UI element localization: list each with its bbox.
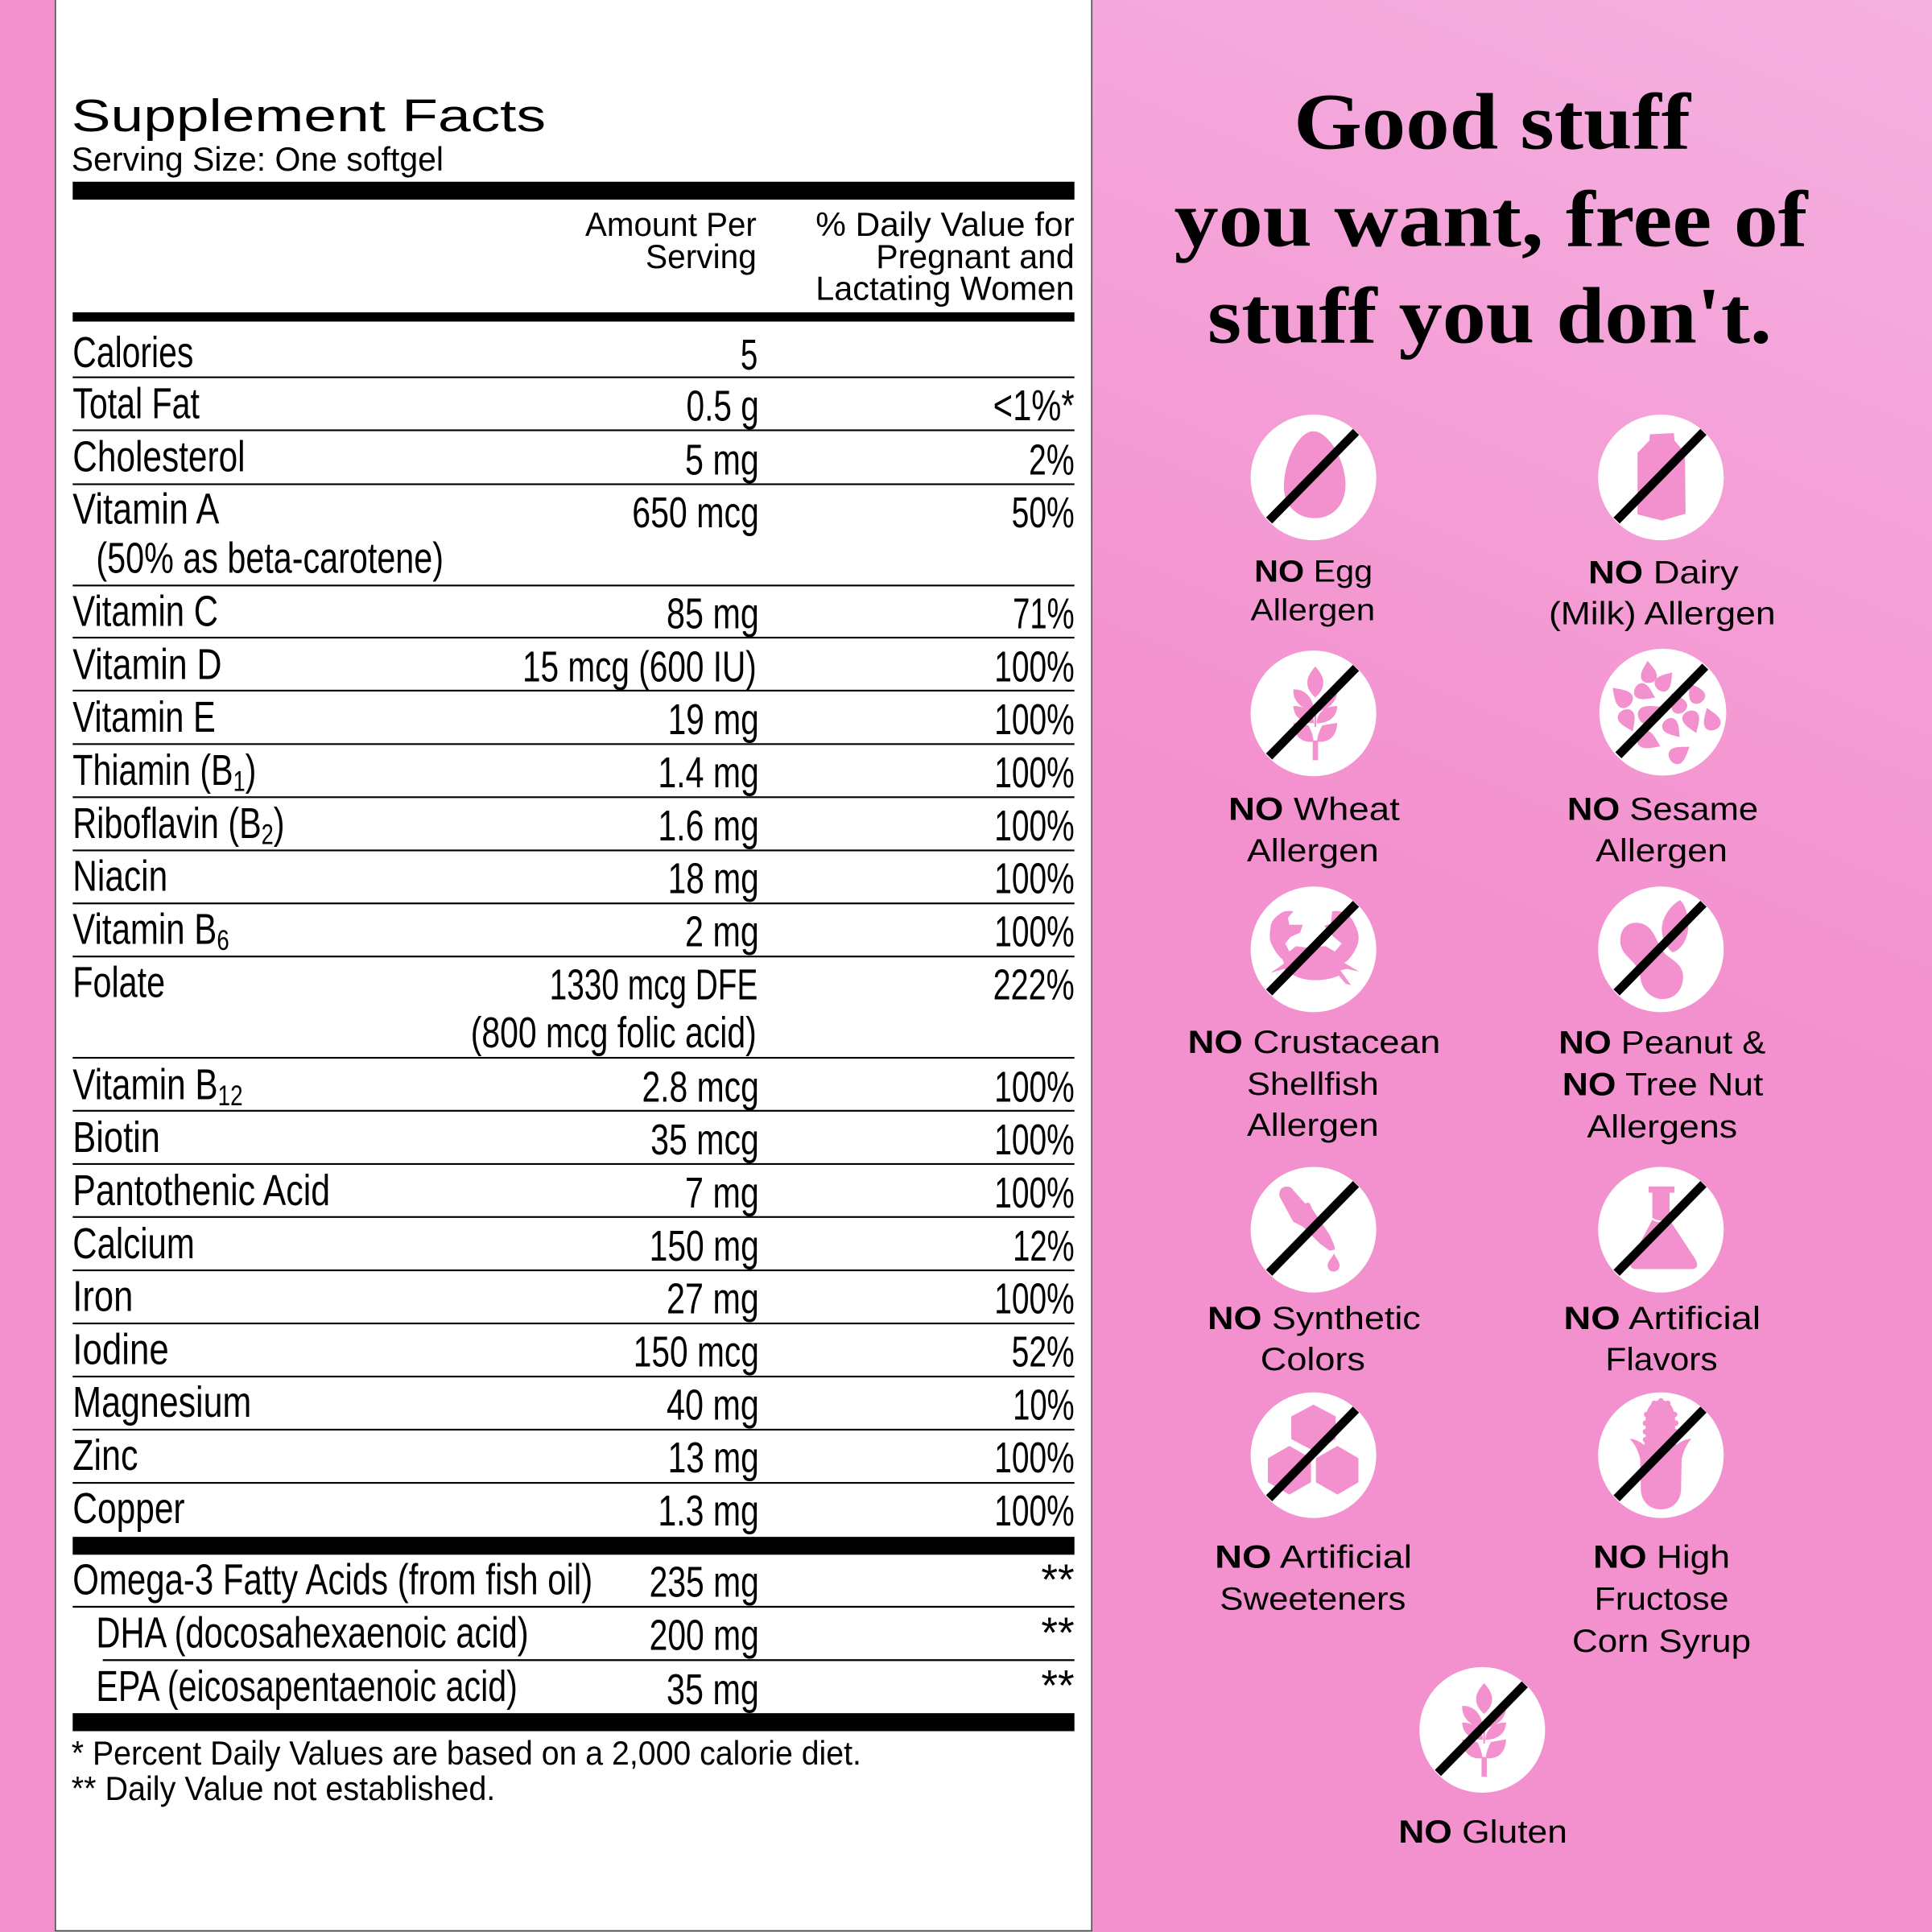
label: no wheat: NO Wheat: [1228, 792, 1400, 828]
label: no peanut and tree nut: NO Tree Nut: [1563, 1067, 1763, 1103]
label: no artificial sweeteners: Sweeteners: [1220, 1582, 1406, 1617]
row: Vitamin B6: 6: [217, 925, 229, 956]
label: no synthetic colors: NO Synthetic: [1208, 1301, 1421, 1336]
row: Iodine: 150 mcg: [634, 1328, 759, 1376]
label: no high fructose corn syrup: NO High: [1593, 1540, 1730, 1575]
row: Niacin: [72, 853, 1075, 903]
row: Vitamin B12: 2.8 mcg: [642, 1063, 759, 1111]
label: no high fructose corn syrup: [1572, 1540, 1751, 1659]
row: Vitamin E: Vitamin E: [72, 694, 216, 741]
row: Vitamin C: 71%: [1013, 591, 1075, 638]
row: Folate: 1330 mcg DFE: [550, 961, 758, 1009]
row: Vitamin A: [72, 486, 1075, 583]
row: Thiamin: [72, 747, 1075, 798]
icon: no wheat: [1251, 650, 1377, 776]
row: Omega-3: Omega-3 Fatty Acids (from fish oil): [72, 1557, 592, 1604]
row: Thiamin: 1.4 mg: [658, 749, 759, 797]
column headers: Lactating Women: [815, 270, 1075, 308]
row: Zinc: 100%: [994, 1435, 1075, 1482]
label: no artificial sweeteners: [1215, 1540, 1412, 1617]
row: Vitamin D: 100%: [994, 643, 1075, 691]
row: Vitamin D: Vitamin D: [72, 641, 222, 688]
label: no artificial flavors: NO Artificial: [1563, 1301, 1761, 1336]
row: Thiamin: ): [246, 747, 256, 795]
row: Total Fat: Total Fat: [72, 381, 200, 428]
label: no high fructose corn syrup: Fructose: [1595, 1582, 1728, 1617]
row: Riboflavin: [72, 800, 1075, 850]
row: Vitamin B6: 100%: [994, 909, 1075, 956]
row: Calories: 5: [741, 332, 758, 379]
row: Calcium: 150 mg: [650, 1223, 759, 1270]
row: Copper: 1.3 mg: [658, 1488, 759, 1535]
row: DHA: 200 mg: [650, 1612, 759, 1659]
row: Riboflavin: 2: [262, 819, 274, 850]
row: Folate: [72, 959, 1075, 1057]
row: Vitamin A: Vitamin A: [72, 486, 220, 534]
row: Iron: 27 mg: [667, 1276, 759, 1323]
row: Vitamin A: 650 mcg: [632, 489, 759, 537]
row: Omega-3: **: [1041, 1557, 1075, 1604]
row: Vitamin C: [72, 588, 1075, 638]
row: Total Fat: 0.5 g: [687, 383, 759, 431]
row: Zinc: Zinc: [72, 1432, 138, 1480]
row: Vitamin A: 50%: [1012, 489, 1075, 537]
heading: [1174, 76, 1809, 361]
row: Vitamin D: [72, 641, 1075, 691]
label: no sesame: [1567, 792, 1758, 869]
row: Riboflavin: ): [274, 800, 285, 848]
row: Pantothenic Acid: 7 mg: [685, 1170, 759, 1217]
row: Folate: (800 mcg folic acid): [471, 1009, 757, 1057]
row: Cholesterol: 5 mg: [685, 436, 759, 484]
label: no peanut and tree nut: [1558, 1026, 1765, 1145]
row: Zinc: 13 mg: [668, 1435, 759, 1482]
row: Pantothenic Acid: Pantothenic Acid: [72, 1167, 330, 1215]
row: Vitamin B12: 12: [218, 1080, 243, 1112]
row: Iron: 100%: [994, 1276, 1075, 1323]
column headers: Amount Per: [585, 206, 757, 243]
row: DHA: **: [1041, 1609, 1075, 1657]
row: Vitamin B12: 100%: [994, 1063, 1075, 1111]
row: EPA: EPA (eicosapentaenoic acid): [96, 1663, 518, 1711]
column headers: Serving: [646, 238, 757, 275]
row: DHA: DHA (docosahexaenoic acid): [96, 1609, 529, 1657]
row: Iodine: Iodine: [72, 1326, 169, 1373]
row: Omega-3: 235 mg: [650, 1559, 759, 1607]
row: Folate: Folate: [72, 959, 165, 1006]
row: Vitamin B6: [72, 906, 1075, 956]
row: Biotin: 35 mcg: [650, 1117, 759, 1164]
row: Magnesium: 10%: [1013, 1381, 1075, 1429]
row: Calcium: Calcium: [72, 1220, 195, 1268]
serving size: Serving Size: One softgel: [72, 141, 444, 178]
row: Vitamin C: Vitamin C: [72, 588, 218, 636]
icon: no dairy: [1598, 415, 1724, 540]
row: Vitamin A: (50% as beta-carotene): [96, 535, 444, 583]
row: Riboflavin: Riboflavin (B: [72, 800, 317, 848]
label: no high fructose corn syrup: Corn Syrup: [1572, 1624, 1751, 1659]
row rules: [72, 377, 1075, 1732]
row: Total Fat: [72, 381, 1075, 431]
row: Calcium: 12%: [1013, 1223, 1075, 1270]
label: no synthetic colors: [1208, 1301, 1421, 1377]
icon: no artificial flavors: [1598, 1166, 1724, 1293]
row: Niacin: 18 mg: [668, 856, 759, 903]
icon: no peanut and tree nut: [1598, 886, 1724, 1012]
heading: you want, free of: [1174, 174, 1809, 263]
row: Vitamin B6: 2 mg: [685, 909, 759, 956]
label: no peanut and tree nut: Allergens: [1587, 1109, 1737, 1145]
row: Riboflavin: 1.6 mg: [658, 803, 759, 850]
heading: Good stuff: [1294, 76, 1692, 166]
footnotes: [72, 1735, 861, 1807]
row: EPA: **: [1041, 1662, 1075, 1710]
panel: supplement facts: [56, 0, 1092, 1930]
label: no crustacean: [1188, 1025, 1440, 1143]
row: Niacin: Niacin: [72, 853, 167, 901]
icon: no artificial sweeteners: [1251, 1393, 1377, 1518]
row: Vitamin E: 19 mg: [668, 696, 759, 744]
row: Copper: [72, 1485, 1075, 1535]
row: Magnesium: 40 mg: [667, 1381, 759, 1429]
icon: no synthetic colors: [1251, 1166, 1377, 1293]
label: no dairy: (Milk) Allergen: [1549, 596, 1776, 631]
row: Thiamin: 100%: [994, 749, 1075, 797]
label: no artificial sweeteners: NO Artificial: [1215, 1540, 1412, 1575]
row: Vitamin D: 15 mcg (600 IU): [522, 643, 757, 691]
row: Thiamin: 1: [233, 766, 246, 798]
row: Vitamin E: 100%: [994, 696, 1075, 744]
label: no dairy: NO Dairy: [1588, 555, 1739, 591]
row: Iron: Iron: [72, 1274, 133, 1321]
row: Iodine: [72, 1326, 1075, 1376]
row: Pantothenic Acid: [72, 1167, 1075, 1217]
row: Total Fat: <1%*: [993, 382, 1075, 430]
row: Pantothenic Acid: 100%: [994, 1170, 1075, 1217]
row: Cholesterol: Cholesterol: [72, 433, 246, 481]
label: no egg: [1251, 554, 1375, 628]
row: Vitamin B12: [72, 1061, 1075, 1112]
row: Iodine: 52%: [1012, 1328, 1075, 1376]
column headers: % Daily Value for: [815, 206, 1075, 243]
column headers: Pregnant and: [876, 238, 1075, 275]
row: Vitamin B6: Vitamin B: [72, 906, 257, 953]
row: Niacin: 100%: [994, 856, 1075, 903]
row: Vitamin B12: Vitamin B: [72, 1061, 257, 1108]
title: Supplement Facts: [72, 91, 546, 142]
heading: stuff you don't.: [1208, 271, 1772, 361]
label: no egg: Allergen: [1251, 593, 1375, 628]
row: Magnesium: [72, 1379, 1075, 1429]
row: Biotin: [72, 1114, 1075, 1164]
row: Zinc: [72, 1432, 1075, 1482]
label: no artificial flavors: [1563, 1301, 1761, 1377]
label: no sesame: NO Sesame: [1567, 792, 1758, 828]
row: Cholesterol: [72, 433, 1075, 484]
label: no peanut and tree nut: NO Peanut &: [1558, 1026, 1765, 1061]
row: EPA: 35 mg: [667, 1666, 759, 1714]
row: Biotin: 100%: [994, 1117, 1075, 1164]
icon: no crustacean shellfish: [1251, 886, 1377, 1012]
row: Thiamin: Thiamin (B: [72, 747, 281, 795]
row: Copper: 100%: [994, 1488, 1075, 1535]
label: no dairy: [1549, 555, 1776, 631]
label: no crustacean: NO Crustacean: [1188, 1025, 1440, 1060]
label: no egg: NO Egg: [1254, 554, 1373, 588]
row: Omega-3: [72, 1557, 1075, 1607]
icon: no gluten: [1419, 1667, 1545, 1793]
label: no gluten: NO Gluten: [1398, 1814, 1567, 1850]
icon: no egg: [1251, 415, 1377, 540]
panel: benefits background: [1092, 0, 1932, 1932]
row: Folate: 222%: [993, 961, 1075, 1009]
row: Magnesium: Magnesium: [72, 1379, 251, 1426]
label: no wheat: [1228, 792, 1400, 869]
footnotes: * Percent Daily Values are based on a 2,000 calorie diet.: [72, 1735, 861, 1772]
row: Vitamin C: 85 mg: [667, 591, 759, 638]
row: Calcium: [72, 1220, 1075, 1270]
label: no synthetic colors: Colors: [1261, 1342, 1365, 1377]
row: Biotin: Biotin: [72, 1114, 160, 1162]
row: Cholesterol: 2%: [1029, 436, 1075, 484]
column headers: [72, 182, 1075, 321]
row: EPA: [96, 1662, 1075, 1714]
footnotes: ** Daily Value not established.: [72, 1770, 495, 1807]
row: Iron: [72, 1274, 1075, 1323]
label: no crustacean: Shellfish: [1247, 1067, 1379, 1102]
label: no crustacean: Allergen: [1247, 1108, 1379, 1143]
row: Calories: Calories: [72, 329, 193, 377]
icon: no high fructose corn syrup: [1598, 1393, 1724, 1518]
label: no sesame: Allergen: [1596, 833, 1728, 869]
row: Copper: Copper: [72, 1485, 185, 1533]
row: Calories: [72, 329, 758, 379]
row: Vitamin E: [72, 694, 1075, 744]
row: DHA: [96, 1609, 1075, 1659]
row: Riboflavin: 100%: [994, 803, 1075, 850]
icon: no sesame: [1600, 649, 1726, 776]
label: no wheat: Allergen: [1247, 833, 1379, 869]
label: no artificial flavors: Flavors: [1605, 1342, 1718, 1377]
